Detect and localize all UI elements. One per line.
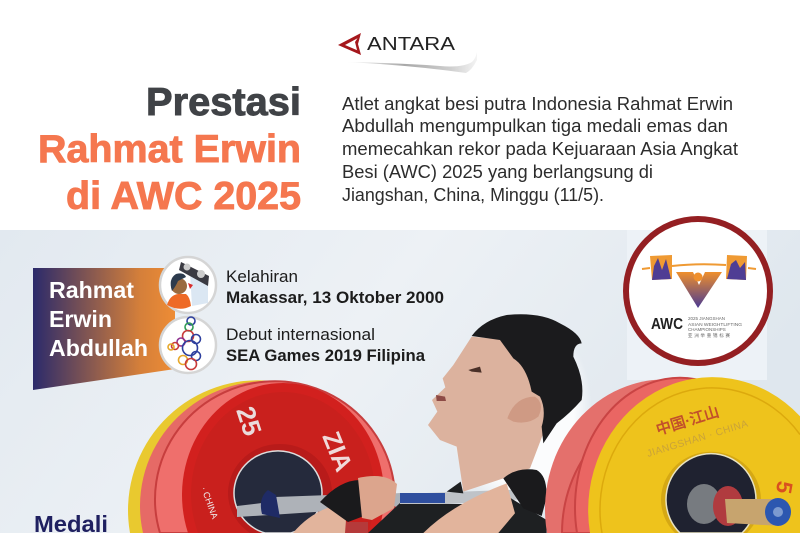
athlete name banner [33,268,175,390]
birth info [226,267,444,307]
title: Rahmat Erwin [38,128,301,171]
birth info: Makassar, 13 Oktober 2000 [226,288,444,307]
logo: AWC 2025 [626,219,770,363]
debut info [226,325,426,365]
intro paragraph [342,94,738,205]
photo: right barbell plates: 5 [771,479,798,496]
logo: AWC 2025: ASIAN WEIGHTLIFTING [688,322,743,327]
intro paragraph: Besi (AWC) 2025 yang berlangsung di [342,162,653,182]
logo: AWC 2025: AWC [651,316,683,333]
shirt [400,492,547,533]
logo: ANTARA [338,33,477,73]
photo: left hand [293,476,400,533]
birth info: Kelahiran [226,267,298,286]
title: Prestasi [146,81,301,124]
ear [507,397,541,423]
logo backing panel [627,230,767,380]
logo: ANTARA: ANTARA [367,34,455,54]
intro paragraph: memecahkan rekor pada Kejuaraan Asia Angkat [342,139,738,159]
neck and face [428,337,567,492]
intro paragraph: Atlet angkat besi putra Indonesia Rahmat Erwin [342,94,733,114]
photo: left barbell plates: · CHINA [199,485,220,520]
hair [472,314,582,443]
athlete name banner: Rahmat [49,277,134,303]
forearm [423,483,515,533]
panel: photo background [0,230,800,533]
logo: AWC 2025: 亚洲举重锦标赛 [688,332,730,339]
collar [447,482,463,493]
debut info: Debut internasional [226,325,375,344]
title [38,81,301,218]
photo: left barbell plates [128,380,395,533]
photo: barbell end [687,484,791,526]
title: di AWC 2025 [66,175,301,218]
debut info: SEA Games 2019 Filipina [226,346,426,365]
photo: right barbell plates: JIANGSHAN · CHINA [646,419,750,460]
wrist wrap [503,469,546,516]
icon: SEA Games rings [160,317,216,373]
athlete name banner: Erwin [49,306,112,332]
icon: birth calendar [160,257,216,313]
athlete name banner: Abdullah [49,335,148,361]
photo: bar and sleeve [237,488,560,518]
photo: athlete [400,314,582,533]
photo: head halo [448,310,592,510]
photo: left barbell plates: ZIA [316,428,357,476]
photo: right barbell plates: 中国·江山 [654,403,721,439]
photo: left barbell plates: 25 [230,403,268,439]
intro paragraph: Abdullah mengumpulkan tiga medali emas dan [342,116,728,136]
eye and lips [468,367,482,373]
logo: AWC 2025: CHAMPIONSHIPS [688,327,726,332]
logo: AWC 2025: 2025 JIANGSHAN [688,316,725,321]
intro paragraph: Jiangshan, China, Minggu (11/5). [342,185,604,205]
photo: right barbell plates [545,377,800,533]
